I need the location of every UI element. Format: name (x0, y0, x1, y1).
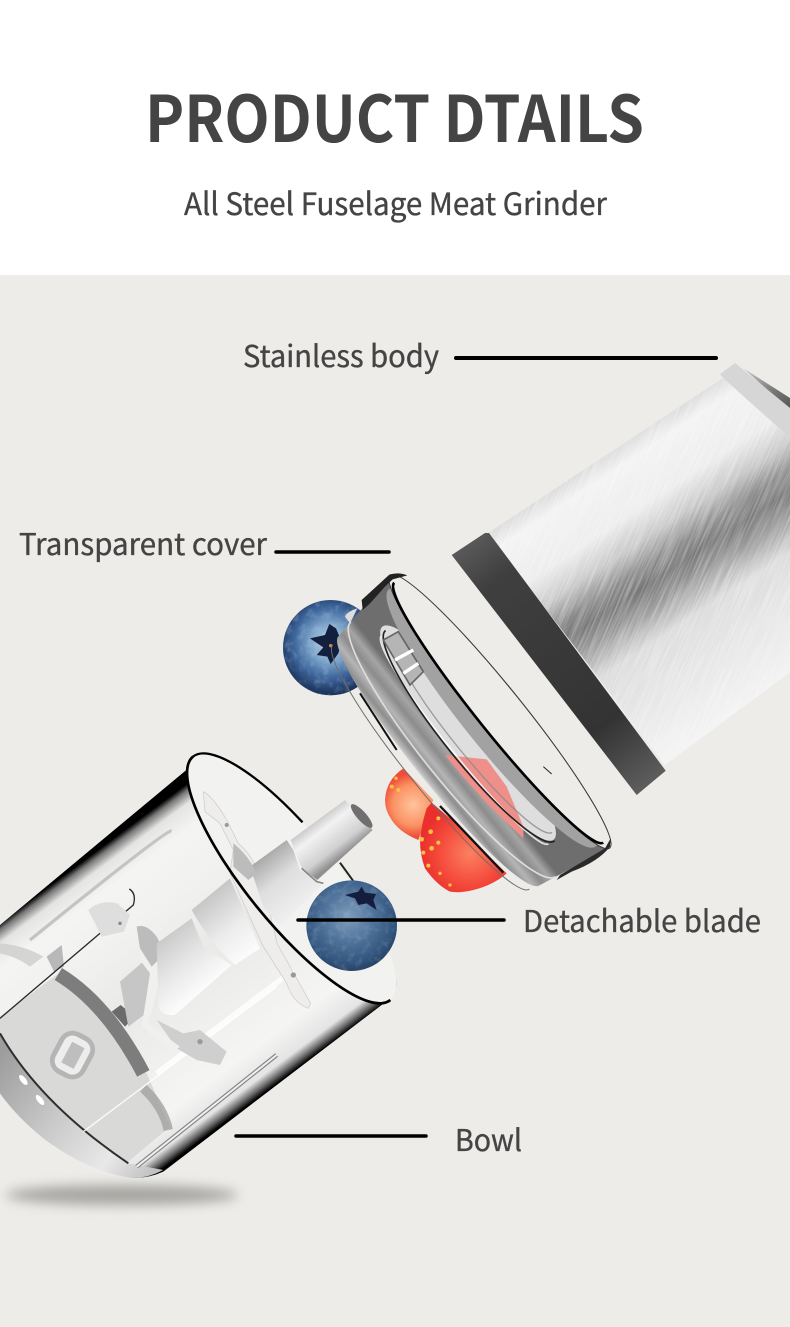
icon: drop shadow under bowl (6, 1185, 238, 1205)
panel: product background (0, 275, 790, 1327)
subtitle: All Steel Fuselage Meat Grinder (184, 179, 608, 224)
leader line and label: stainless body: Stainless body (243, 332, 439, 376)
spindle (157, 918, 232, 1015)
icon: blueberry inside bowl (306, 880, 397, 971)
icon: blueberry behind lid (283, 600, 378, 695)
leader line and label: detachable blade: Detachable blade (523, 897, 761, 941)
blades (88, 902, 130, 937)
glass bar (137, 1055, 277, 1167)
panel: white header background (0, 0, 790, 275)
knob (45, 1025, 100, 1085)
leader line and label: bowl: Bowl (455, 1116, 522, 1160)
leader line and label: transparent cover: Transparent cover (19, 520, 267, 564)
icon: transparent lid (304, 561, 628, 918)
inner base disc (0, 970, 170, 1162)
rim (158, 729, 424, 1028)
outer base ring (0, 1033, 163, 1178)
title: PRODUCT DTAILS (145, 69, 644, 161)
strawberry seen through lid (445, 755, 523, 838)
icon: stainless steel motor body (452, 363, 790, 795)
icon: strawberry slices (385, 768, 507, 892)
icon: transparent bowl (0, 728, 425, 1178)
